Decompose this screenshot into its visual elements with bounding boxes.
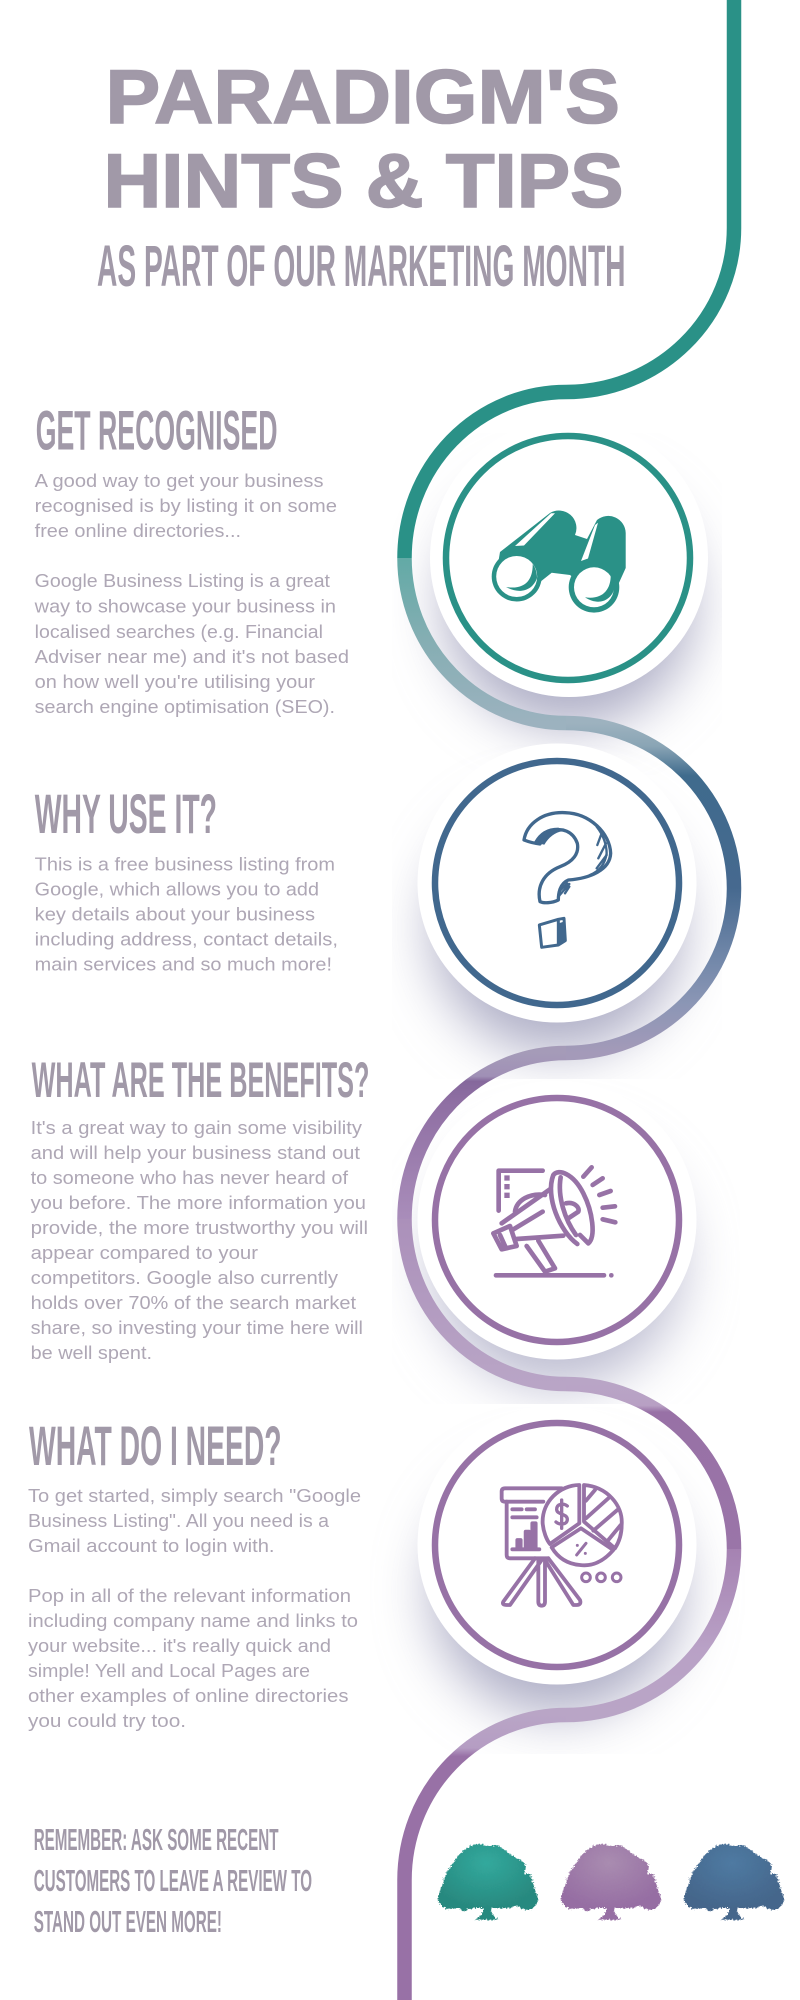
text block: benefits: share, so investing your time here will (31, 1317, 363, 1338)
text block: what do i need (28, 1485, 361, 1731)
text block: what do i need: simple! Yell and Local Pages are (28, 1660, 310, 1681)
text block: get recognised: way to showcase your business in (34, 596, 336, 616)
icon: teal tree (438, 1844, 538, 1920)
text block: why use it: This is a free business listing from (35, 854, 335, 874)
title: PARADIGM'S (106, 55, 620, 140)
heading: what are the benefits: WHAT ARE THE BENEFITS? (32, 1052, 369, 1108)
text block: benefits: to someone who has never heard of (31, 1167, 349, 1188)
text block: what do i need: Pop in all of the relevant information (28, 1585, 351, 1606)
text block: benefits: competitors. Google also currently (31, 1267, 339, 1288)
text block: what do i need: Business Listing". All you need is a (28, 1510, 330, 1531)
text block: why use it: main services and so much more! (35, 954, 332, 974)
heading: what do i need: WHAT DO I NEED? (29, 1414, 282, 1477)
text block: get recognised: Adviser near me) and it's not based (35, 646, 349, 667)
text block: get recognised: free online directories... (35, 520, 241, 541)
icon: blue tree (684, 1844, 784, 1920)
icon: presentation chart (502, 1485, 622, 1606)
shadow behind circle 2 (432, 803, 682, 1053)
text block: benefits: holds over 70% of the search market (31, 1292, 356, 1313)
circle: megaphone (418, 1080, 696, 1360)
text block: why use it: Google, which allows you to add (35, 878, 319, 900)
callout: remember: STAND OUT EVEN MORE! (34, 1904, 222, 1939)
callout: remember: REMEMBER: ASK SOME RECENT (34, 1822, 279, 1857)
heading: why use it: WHY USE IT? (35, 782, 217, 845)
icon: purple tree (561, 1844, 661, 1920)
shadow behind circle 4 (432, 1465, 682, 1715)
text: GET RECOGNISED (36, 398, 278, 462)
title (104, 55, 624, 224)
text block: get recognised: search engine optimisation (SEO). (35, 696, 335, 717)
text block: benefits: you before. The more information you (31, 1192, 366, 1213)
text block: what do i need: your website... it's really quick and (28, 1635, 331, 1656)
winding timeline path (404, 0, 734, 2000)
text block: what do i need: including company name and links to (28, 1610, 358, 1631)
text block: why use it: including address, contact details, (35, 928, 338, 950)
text block: benefits (31, 1117, 368, 1363)
text block: why use it: key details about your business (35, 904, 315, 924)
circle: binoculars (430, 419, 708, 697)
shadow behind circle 1 (444, 478, 694, 728)
shadow behind circle 3 (432, 1137, 682, 1387)
circle: question mark (418, 744, 696, 1022)
text block: what do i need: you could try too. (28, 1710, 186, 1731)
text block: what do i need: other examples of online directories (28, 1685, 348, 1706)
icon: question mark (524, 813, 611, 947)
text block: benefits: It's a great way to gain some visibility (31, 1117, 363, 1138)
text block: benefits: appear compared to your (31, 1242, 258, 1263)
text block: benefits: be well spent. (31, 1342, 152, 1363)
text: CUSTOMERS TO LEAVE A REVIEW TO (34, 1863, 312, 1898)
text block: get recognised: on how well you're utilising your (35, 671, 315, 692)
text block: why use it (35, 854, 338, 974)
text block: get recognised: A good way to get your business (35, 470, 323, 491)
icon: binoculars (492, 511, 626, 613)
text block: benefits: provide, the more trustworthy you will (31, 1217, 368, 1238)
text block: what do i need: To get started, simply search "Google (28, 1485, 361, 1506)
text block: what do i need: Gmail account to login with. (28, 1535, 274, 1556)
title: HINTS & TIPS (104, 139, 624, 224)
text block: get recognised (34, 470, 349, 717)
circle: presentation chart (418, 1406, 696, 1684)
text block: get recognised: localised searches (e.g. Financial (35, 621, 323, 642)
text block: get recognised: recognised is by listing it on some (35, 495, 337, 516)
text block: benefits: and will help your business stand out (31, 1142, 360, 1163)
callout: remember (34, 1822, 312, 1939)
text block: get recognised: Google Business Listing is a great (35, 570, 330, 591)
icon: megaphone (493, 1167, 615, 1278)
